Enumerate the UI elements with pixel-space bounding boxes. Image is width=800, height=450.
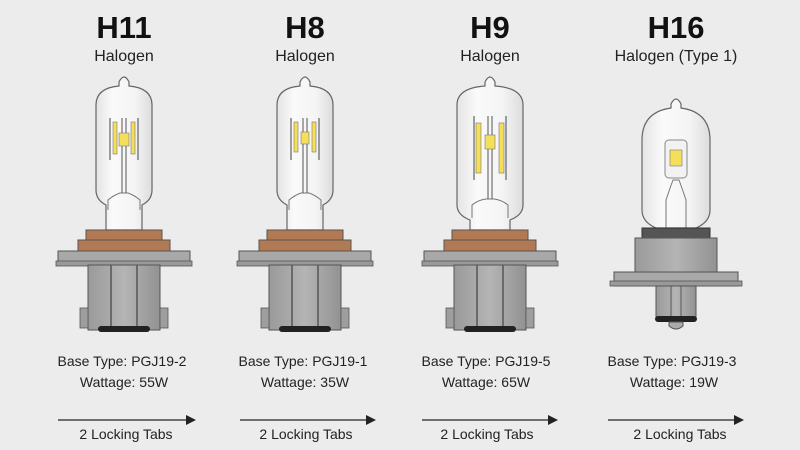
title: H8: H8	[285, 10, 325, 45]
bulb: H11	[56, 77, 192, 332]
title: H9: Halogen	[460, 48, 520, 65]
bulb: H8	[237, 77, 373, 332]
arrow: H16 tabs: 2 Locking Tabs	[633, 426, 727, 442]
specs: H9: Base Type: PGJ19-5	[422, 353, 551, 369]
title: H11	[94, 10, 154, 65]
title: H16: Halogen (Type 1)	[615, 48, 737, 65]
arrow: H11 tabs: 2 Locking Tabs	[79, 426, 173, 442]
arrow: H8 tabs: 2 Locking Tabs	[259, 426, 353, 442]
specs: H11: Base Type: PGJ19-2	[58, 353, 187, 369]
specs: H8: Wattage: 35W	[261, 374, 350, 390]
specs: H11	[58, 353, 187, 390]
arrow: H9 tabs: 2 Locking Tabs	[440, 426, 534, 442]
title: H8: Halogen	[275, 48, 335, 65]
specs: H11: Wattage: 55W	[80, 374, 169, 390]
title: H9: H9	[470, 10, 510, 45]
specs: H9: Wattage: 65W	[442, 374, 531, 390]
specs: H9	[422, 353, 551, 390]
specs: H16	[608, 353, 737, 390]
bulb: H16	[610, 99, 742, 329]
arrow: H11 tabs	[58, 415, 196, 442]
title: H11: Halogen	[94, 48, 154, 65]
arrow: H9 tabs	[422, 415, 558, 442]
specs: H8	[239, 353, 368, 390]
title: H11: H11	[96, 10, 152, 45]
arrow: H16 tabs	[608, 415, 744, 442]
specs: H8: Base Type: PGJ19-1	[239, 353, 368, 369]
title: H16	[615, 10, 737, 65]
bulb: H9	[422, 77, 558, 332]
specs: H16: Base Type: PGJ19-3	[608, 353, 737, 369]
arrow: H8 tabs	[240, 415, 376, 442]
title: H16: H16	[648, 10, 704, 45]
title: H8	[275, 10, 335, 65]
specs: H16: Wattage: 19W	[630, 374, 719, 390]
title: H9	[460, 10, 520, 65]
